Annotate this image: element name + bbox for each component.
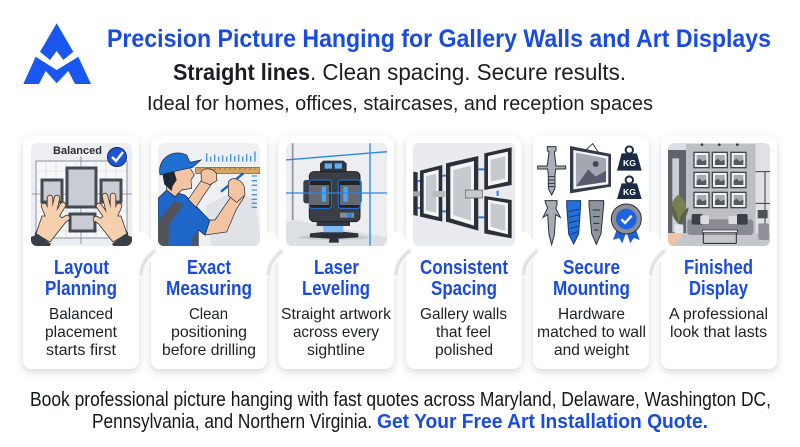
description: starts first bbox=[46, 342, 117, 359]
heading bbox=[45, 257, 117, 300]
description: look that lasts bbox=[670, 324, 767, 341]
description: Balanced bbox=[49, 306, 113, 323]
icon: balanced layout bbox=[31, 143, 132, 248]
tagline bbox=[173, 59, 626, 85]
heading: Layout bbox=[54, 257, 109, 279]
description: Clean bbox=[189, 306, 228, 323]
card: layout planning bbox=[23, 136, 139, 369]
heading bbox=[302, 257, 370, 300]
heading: Laser bbox=[314, 257, 359, 279]
heading bbox=[420, 257, 508, 300]
connector arrow 3 bbox=[392, 232, 414, 278]
heading: Consistent bbox=[420, 257, 508, 279]
call to action: Get Your Free Art Installation Quote. bbox=[377, 411, 708, 433]
heading: Spacing bbox=[431, 278, 497, 300]
tagline: Straight lines bbox=[173, 59, 310, 85]
icon: finished room bbox=[668, 143, 772, 246]
description: matched to wall bbox=[537, 324, 646, 341]
heading: Finished bbox=[684, 257, 753, 279]
label: KG weight bottom: KG bbox=[623, 187, 636, 197]
connector arrow 5 bbox=[647, 232, 669, 278]
heading bbox=[553, 257, 630, 300]
description: sightline bbox=[307, 342, 365, 359]
connector arrow 1 bbox=[137, 232, 159, 278]
description: across every bbox=[293, 324, 379, 341]
description bbox=[420, 306, 507, 359]
description: before drilling bbox=[162, 342, 256, 359]
tagline: . Clean spacing. Secure results. bbox=[310, 59, 626, 85]
audience line: Ideal for homes, offices, staircases, and reception spaces bbox=[147, 93, 653, 115]
heading bbox=[166, 257, 252, 300]
icon: worker measuring bbox=[158, 143, 262, 252]
card: secure mounting bbox=[533, 136, 649, 369]
logo bbox=[23, 23, 91, 84]
description: and weight bbox=[554, 342, 630, 359]
description bbox=[162, 306, 256, 359]
heading: Planning bbox=[45, 278, 117, 300]
label: KG weight top: KG bbox=[623, 158, 636, 168]
description: positioning bbox=[171, 324, 247, 341]
icon: gallery wall frames bbox=[413, 143, 515, 246]
icon: laser level bbox=[286, 143, 387, 246]
heading: Exact bbox=[187, 257, 231, 279]
heading: Leveling bbox=[302, 278, 370, 300]
description: Hardware bbox=[558, 306, 625, 323]
heading: Mounting bbox=[553, 278, 630, 300]
description bbox=[669, 306, 768, 341]
card: exact measuring bbox=[151, 136, 267, 369]
connector arrow 2 bbox=[264, 232, 286, 278]
card: consistent spacing bbox=[406, 136, 522, 369]
card: laser leveling bbox=[278, 136, 394, 369]
description bbox=[281, 306, 392, 359]
description bbox=[537, 306, 646, 359]
description: polished bbox=[435, 342, 493, 359]
heading bbox=[684, 257, 753, 300]
description: A professional bbox=[669, 306, 768, 323]
icon: blue check badge bbox=[108, 148, 126, 166]
footer text: Pennsylvania, and Northern Virginia. bbox=[92, 411, 372, 433]
description: placement bbox=[45, 324, 118, 341]
heading: Secure bbox=[563, 257, 620, 279]
description: Gallery walls bbox=[420, 306, 507, 323]
description: Straight artwork bbox=[281, 306, 392, 323]
footer text bbox=[30, 389, 771, 433]
description bbox=[45, 306, 118, 359]
card: finished display bbox=[661, 136, 777, 369]
heading: Measuring bbox=[166, 278, 252, 300]
icon: mounting hardware bbox=[538, 144, 642, 245]
label: balanced: Balanced bbox=[53, 145, 102, 157]
connector arrow 4 bbox=[520, 232, 542, 278]
heading: Display bbox=[689, 278, 749, 300]
description: that feel bbox=[436, 324, 491, 341]
